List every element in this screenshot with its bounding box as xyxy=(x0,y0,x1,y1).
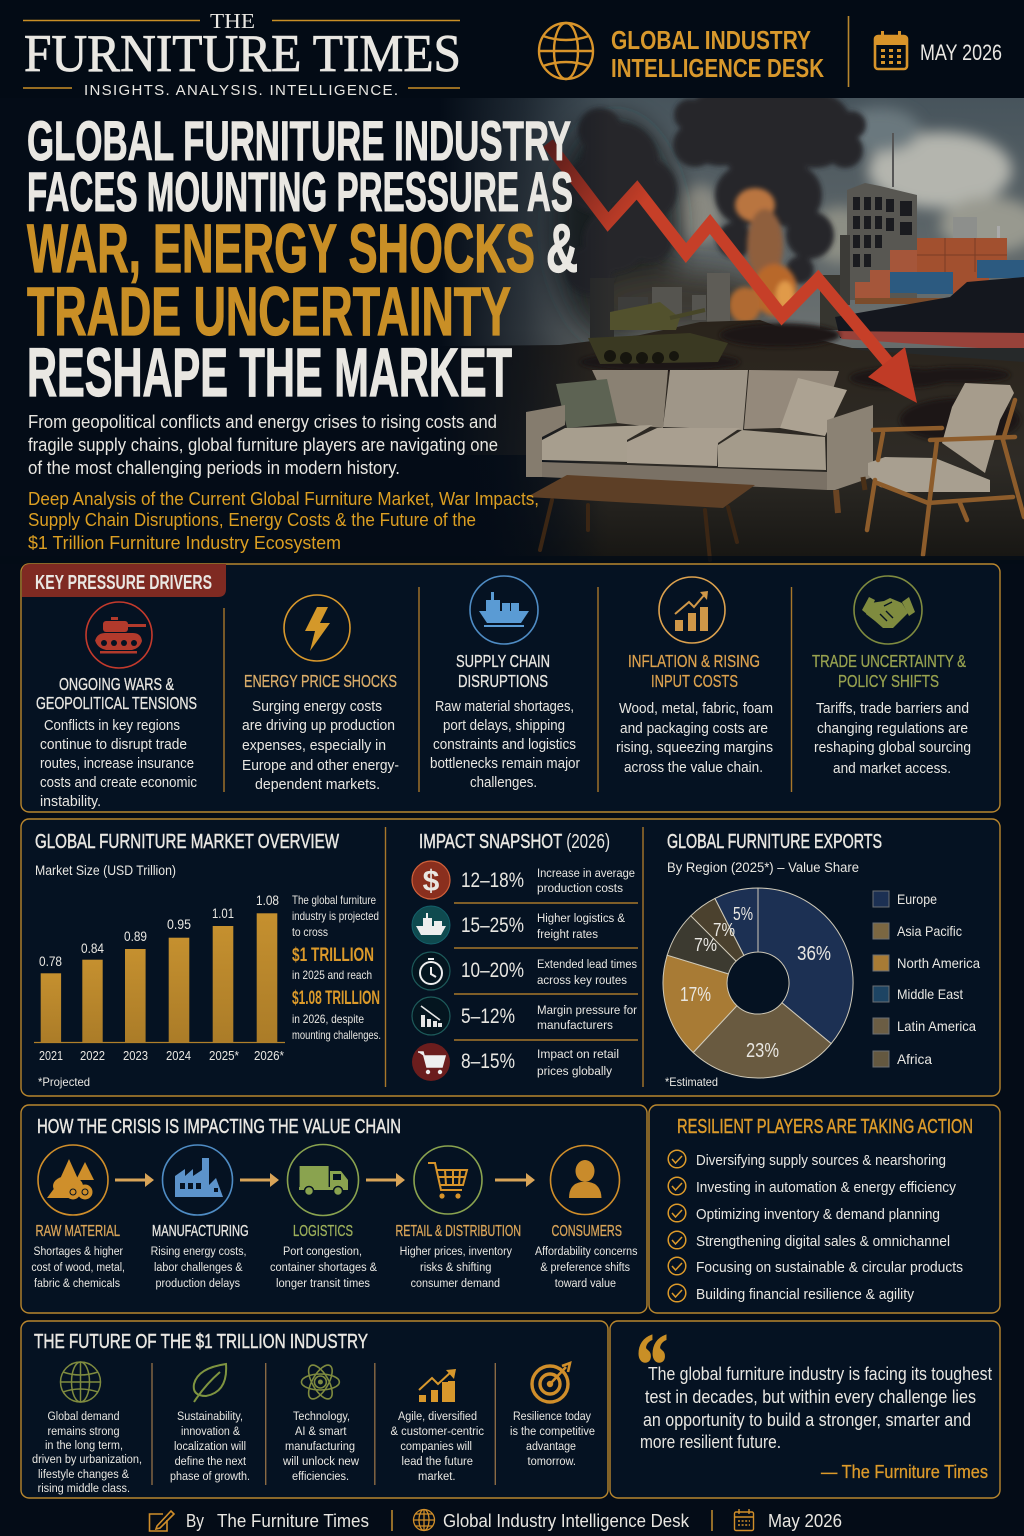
driver: wars: continue to disrupt trade xyxy=(40,737,187,753)
donut chart: exports xyxy=(663,888,853,1078)
chart legend: Europe xyxy=(897,891,937,907)
section tag: KEY PRESSURE DRIVERS xyxy=(35,572,212,594)
driver: energy: Europe and other energy- xyxy=(242,758,399,774)
chart legend: Africa xyxy=(897,1051,932,1067)
bar chart: market size: 0.89 xyxy=(124,928,147,944)
driver: wars: GEOPOLITICAL TENSIONS xyxy=(36,693,197,713)
masthead: The Furniture Times: FURNITURE TIMES xyxy=(24,25,461,83)
impact: retail xyxy=(412,1043,619,1081)
bar chart: market size: 1.01 xyxy=(212,905,234,921)
icon: footer globe xyxy=(414,1510,434,1530)
headline: RESHAPE THE MARKET xyxy=(27,334,512,411)
driver: trade: Tariffs, trade barriers and xyxy=(816,701,969,717)
future: technology: will unlock new xyxy=(282,1454,359,1468)
chart legend: *Estimated xyxy=(665,1075,718,1089)
chart legend xyxy=(665,891,980,1089)
future: sustainability xyxy=(170,1364,250,1483)
driver: inflation: and packaging costs are xyxy=(620,721,768,737)
driver: wars: ONGOING WARS & xyxy=(59,674,174,694)
quote text: an opportunity to build a stronger, smarter and xyxy=(643,1410,971,1430)
future: agile: market. xyxy=(418,1469,456,1483)
exports heading: By Region (2025*) – Value Share xyxy=(667,859,859,875)
driver: wars xyxy=(36,602,197,810)
icon: globe xyxy=(539,23,593,79)
quote text: test in decades, but within every challenge lies xyxy=(645,1387,976,1407)
coffee table xyxy=(527,475,755,560)
checklist: Building financial resilience & agility xyxy=(696,1286,914,1303)
future: agile: Agile, diversified xyxy=(398,1409,477,1423)
driver: wars: costs and create economic xyxy=(40,775,197,791)
driver: energy: Surging energy costs xyxy=(252,699,382,715)
donut chart: exports: 17% xyxy=(680,984,711,1006)
panel: key pressure drivers xyxy=(21,564,1000,812)
driver: trade: and market access. xyxy=(833,761,951,777)
arrow xyxy=(366,1173,405,1187)
footer xyxy=(150,1509,842,1531)
sofa xyxy=(526,370,873,513)
arrow xyxy=(115,1173,154,1187)
footer: The Furniture Times xyxy=(217,1511,369,1531)
impact list xyxy=(412,861,638,1081)
panel: the future xyxy=(21,1321,608,1498)
quote mark: “ xyxy=(636,1317,668,1414)
impact: production costs: $ xyxy=(423,865,440,898)
driver: supply chain: port delays, shipping xyxy=(443,718,565,734)
rubble ground xyxy=(0,320,1024,560)
panel: value chain: HOW THE CRISIS IS IMPACTING THE VALUE CHAIN xyxy=(37,1116,401,1138)
checklist: Focusing on sustainable & circular products xyxy=(696,1259,963,1276)
panel: resilient players xyxy=(649,1105,1000,1313)
driver: supply chain xyxy=(430,576,580,791)
step: raw material xyxy=(31,1145,125,1290)
market callout: in 2026, despite xyxy=(292,1013,364,1026)
step: logistics: Port congestion, xyxy=(283,1244,362,1258)
market callout: to cross xyxy=(292,926,328,939)
future: sustainability: phase of growth. xyxy=(170,1469,250,1483)
step: retail: risks & shifting xyxy=(420,1260,491,1274)
future: global demand: Global demand xyxy=(48,1409,120,1423)
masthead: The Furniture Times: INSIGHTS. ANALYSIS. INTELLIGENCE. xyxy=(84,82,398,99)
driver: supply chain: Raw material shortages, xyxy=(435,699,574,715)
gold subhead: $1 Trillion Furniture Industry Ecosystem xyxy=(28,533,341,553)
step: raw material: cost of wood, metal, xyxy=(31,1260,125,1274)
desk title: GLOBAL INDUSTRY xyxy=(611,25,811,55)
ruined tower xyxy=(840,133,917,305)
driver: energy: are driving up production xyxy=(242,718,395,734)
quote text xyxy=(640,1364,992,1452)
hero illustration xyxy=(0,65,1024,568)
driver: inflation: across the value chain. xyxy=(624,760,763,776)
impact: margins: Margin pressure for xyxy=(537,1003,637,1017)
future: resilience: advantage xyxy=(526,1439,576,1453)
impact: margins: 5–12% xyxy=(461,1005,515,1028)
future: resilience: is the competitive xyxy=(510,1424,595,1438)
future: sustainability: localization will xyxy=(174,1439,246,1453)
bar chart: market size: 1.08 xyxy=(256,892,279,908)
donut chart: exports: 7% xyxy=(713,920,735,940)
checklist xyxy=(668,1150,963,1303)
intro paragraph: From geopolitical conflicts and energy crises to rising costs and xyxy=(28,412,497,432)
driver: wars: routes, increase insurance xyxy=(40,756,194,772)
impact: production costs: production costs xyxy=(537,881,623,895)
market callout: The global furniture xyxy=(292,894,376,907)
desk title: INTELLIGENCE DESK xyxy=(611,53,824,83)
driver: trade: reshaping global sourcing xyxy=(814,740,971,756)
icon: pencil xyxy=(150,1511,174,1531)
future: global demand: lifestyle changes & xyxy=(38,1467,129,1481)
driver: inflation xyxy=(616,577,773,776)
market overview heading xyxy=(35,831,339,878)
future: global demand: rising middle class. xyxy=(38,1481,130,1495)
step: consumers: CONSUMERS xyxy=(552,1223,622,1240)
impact: margins xyxy=(412,997,637,1035)
impact: lead times xyxy=(412,952,637,990)
container ship xyxy=(830,217,1024,368)
bar chart: market size: 0.95 xyxy=(167,916,191,932)
bar chart: market size: 2021 xyxy=(39,1048,63,1063)
step: retail: Higher prices, inventory xyxy=(400,1244,513,1258)
bar chart: market size xyxy=(34,892,285,1089)
chart legend: Asia Pacific xyxy=(897,923,962,939)
checklist: Diversifying supply sources & nearshoring xyxy=(696,1152,946,1169)
driver: supply chain: DISRUPTIONS xyxy=(458,671,548,691)
driver: supply chain: constraints and logistics xyxy=(433,737,576,753)
quote text: more resilient future. xyxy=(640,1432,781,1452)
masthead: The Furniture Times: THE xyxy=(210,9,255,33)
checklist: Strengthening digital sales & omnichannel xyxy=(696,1233,950,1250)
impact: logistics: freight rates xyxy=(537,927,598,941)
step: retail xyxy=(396,1146,521,1290)
bar chart: market size: 0.84 xyxy=(81,940,104,956)
driver: inflation: rising, squeezing margins xyxy=(616,740,773,756)
driver: wars: Conflicts in key regions xyxy=(44,718,180,734)
market overview heading: Market Size (USD Trillion) xyxy=(35,862,176,878)
attribution: — The Furniture Times xyxy=(821,1462,988,1482)
driver: inflation: INPUT COSTS xyxy=(651,671,738,691)
panel: quote xyxy=(610,1317,1000,1498)
impact: production costs: Increase in average xyxy=(537,866,635,880)
bar chart: market size: *Projected xyxy=(38,1075,90,1089)
future: resilience: tomorrow. xyxy=(528,1454,576,1468)
impact: retail: Impact on retail xyxy=(537,1047,619,1061)
step: retail: consumer demand xyxy=(411,1276,500,1290)
impact snapshot heading: IMPACT SNAPSHOT (2026) xyxy=(419,831,610,853)
impact: retail: prices globally xyxy=(537,1064,613,1078)
driver: trade xyxy=(812,576,971,777)
step: manufacturing xyxy=(151,1145,249,1290)
step: logistics: LOGISTICS xyxy=(293,1223,353,1240)
bar chart: market size: 2024 xyxy=(166,1048,191,1063)
step: raw material: fabric & chemicals xyxy=(34,1276,120,1290)
future: technology: AI & smart xyxy=(295,1424,347,1438)
donut chart: exports: 23% xyxy=(746,1040,779,1062)
impact: logistics: 15–25% xyxy=(461,914,524,937)
step: manufacturing: MANUFACTURING xyxy=(152,1223,249,1240)
chart legend: Latin America xyxy=(897,1018,976,1034)
step: consumers xyxy=(535,1146,638,1290)
future: agile: & customer-centric xyxy=(390,1424,484,1438)
intro paragraph xyxy=(28,412,498,478)
impact: lead times: across key routes xyxy=(537,973,627,987)
future: agile: lead the future xyxy=(402,1454,473,1468)
market overview heading: GLOBAL FURNITURE MARKET OVERVIEW xyxy=(35,831,339,853)
future: global demand xyxy=(32,1362,142,1495)
future: technology xyxy=(282,1362,359,1483)
step: logistics: longer transit times xyxy=(276,1276,370,1290)
footer: Global Industry Intelligence Desk xyxy=(443,1511,690,1531)
armchair xyxy=(867,383,1024,555)
headline xyxy=(27,109,578,411)
headline: WAR, ENERGY SHOCKS xyxy=(27,210,535,287)
market callout: $1 TRILLION xyxy=(292,945,374,966)
left fade xyxy=(0,98,610,568)
bar chart: market size: 2022 xyxy=(80,1048,105,1063)
future: technology: manufacturing xyxy=(285,1439,355,1453)
desk title xyxy=(611,25,824,83)
checklist: Investing in automation & energy efficiency xyxy=(696,1179,956,1196)
future: sustainability: innovation & xyxy=(181,1424,240,1438)
future: sustainability: Sustainability, xyxy=(177,1409,243,1423)
driver: energy: expenses, especially in xyxy=(242,738,386,754)
icon: footer calendar xyxy=(734,1509,754,1530)
chart legend: North America xyxy=(897,955,980,971)
impact: margins: manufacturers xyxy=(537,1018,613,1032)
driver: inflation: INFLATION & RISING xyxy=(628,651,760,671)
impact: production costs: 12–18% xyxy=(461,869,524,892)
driver: inflation: Wood, metal, fabric, foam xyxy=(619,701,773,717)
panel: market data xyxy=(21,819,1000,1096)
issue date: MAY 2026 xyxy=(920,40,1002,65)
checklist: Optimizing inventory & demand planning xyxy=(696,1206,940,1223)
future: sustainability: define the next xyxy=(175,1454,247,1468)
masthead: The Furniture Times xyxy=(0,0,1024,99)
red down arrow xyxy=(548,143,917,403)
gold subhead: Supply Chain Disruptions, Energy Costs & the Future of the xyxy=(28,510,476,530)
driver: wars: instability. xyxy=(40,794,101,810)
donut chart: exports: 5% xyxy=(733,904,753,924)
driver: supply chain: challenges. xyxy=(470,775,537,791)
future: resilience: Resilience today xyxy=(513,1409,592,1423)
driver: trade: TRADE UNCERTAINTY & xyxy=(812,651,966,671)
driver: energy: ENERGY PRICE SHOCKS xyxy=(244,671,397,691)
step: raw material: RAW MATERIAL xyxy=(36,1223,120,1240)
intro paragraph: of the most challenging periods in modern history. xyxy=(28,458,400,478)
gold subhead xyxy=(28,489,539,553)
chart legend: Middle East xyxy=(897,986,963,1002)
footer: May 2026 xyxy=(768,1511,842,1531)
driver: trade: POLICY SHIFTS xyxy=(838,671,939,691)
footer: By xyxy=(186,1511,204,1531)
step: logistics xyxy=(270,1144,377,1290)
arrow xyxy=(240,1173,279,1187)
market callout: industry is projected xyxy=(292,910,379,923)
step: consumers: & preference shifts xyxy=(540,1260,630,1274)
bar chart: market size: 2025* xyxy=(209,1048,239,1063)
bar chart: market size: 2026* xyxy=(254,1048,284,1063)
driver: supply chain: SUPPLY CHAIN xyxy=(456,651,550,671)
future: agile: companies will xyxy=(400,1439,472,1453)
future: technology: efficiencies. xyxy=(292,1469,349,1483)
driver: supply chain: bottlenecks remain major xyxy=(430,756,580,772)
driver: trade: changing regulations are xyxy=(817,721,968,737)
headline: & xyxy=(546,210,578,287)
driver: energy xyxy=(242,595,399,793)
impact: logistics xyxy=(412,906,626,944)
impact: retail: 8–15% xyxy=(461,1050,515,1073)
future: global demand: remains strong xyxy=(48,1424,120,1438)
future: global demand: in the long term, xyxy=(45,1438,123,1452)
headline: GLOBAL FURNITURE INDUSTRY xyxy=(27,109,571,172)
bar chart: market size: 0.78 xyxy=(39,953,62,969)
arrow xyxy=(495,1173,535,1187)
distant ruins xyxy=(590,273,848,338)
market callout: mounting challenges. xyxy=(292,1029,381,1042)
step: consumers: Affordability concerns xyxy=(535,1244,638,1258)
tank xyxy=(588,302,728,364)
future: global demand: driven by urbanization, xyxy=(32,1452,142,1466)
impact: lead times: 10–20% xyxy=(461,959,524,982)
impact: lead times: Extended lead times xyxy=(537,957,637,971)
headline: TRADE UNCERTAINTY xyxy=(27,273,511,350)
donut chart: exports: 7% xyxy=(694,935,717,955)
step: manufacturing: production delays xyxy=(156,1276,240,1290)
intro paragraph: fragile supply chains, global furniture players are navigating one xyxy=(28,435,498,455)
panel: the future: THE FUTURE OF THE $1 TRILLION INDUSTRY xyxy=(34,1331,368,1353)
headline: FACES MOUNTING PRESSURE AS xyxy=(27,160,573,223)
market callout: $1.08 TRILLION xyxy=(292,988,380,1009)
exports heading: GLOBAL FURNITURE EXPORTS xyxy=(667,831,882,853)
driver: energy: dependent markets. xyxy=(255,777,380,793)
market callout xyxy=(292,894,381,1042)
step: consumers: toward value xyxy=(555,1276,616,1290)
bar chart: market size: 2023 xyxy=(123,1048,148,1063)
icon: calendar xyxy=(875,31,907,69)
gold subhead: Deep Analysis of the Current Global Furniture Market, War Impacts, xyxy=(28,489,539,509)
panel: value chain xyxy=(21,1105,647,1313)
impact: production costs xyxy=(412,861,635,899)
future: agile xyxy=(390,1369,484,1483)
market callout: in 2025 and reach xyxy=(292,969,372,982)
future: technology: Technology, xyxy=(293,1409,350,1423)
step: manufacturing: labor challenges & xyxy=(154,1260,242,1274)
step: retail: RETAIL & DISTRIBUTION xyxy=(396,1223,521,1240)
section tag xyxy=(22,564,226,597)
step: manufacturing: Rising energy costs, xyxy=(151,1244,246,1258)
exports heading xyxy=(667,831,882,875)
step: logistics: container shortages & xyxy=(270,1260,377,1274)
donut chart: exports: 36% xyxy=(797,943,831,965)
step: raw material: Shortages & higher xyxy=(34,1244,123,1258)
impact: logistics: Higher logistics & xyxy=(537,911,626,925)
future: resilience xyxy=(510,1363,595,1468)
